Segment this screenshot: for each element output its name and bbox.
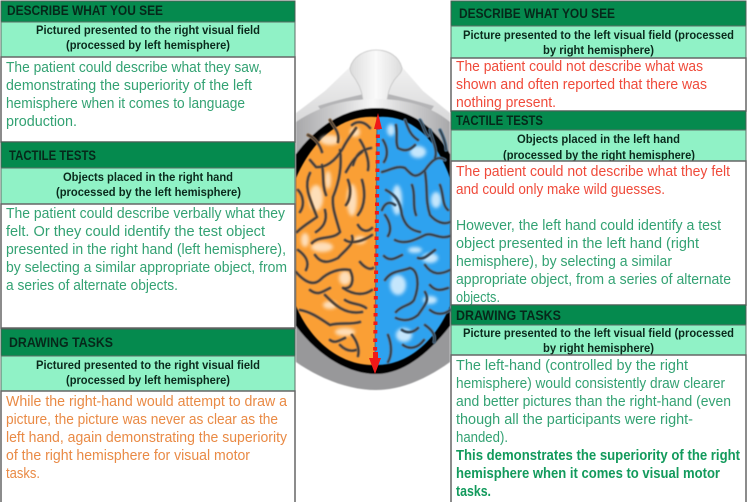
result text: objects.: [456, 290, 500, 306]
head outline: grey skull and nose: [296, 50, 450, 390]
right panel: describe what you see: [451, 1, 746, 111]
result text: hemisphere when it comes to language: [6, 96, 245, 112]
condition: [1, 356, 295, 391]
heading: DRAWING TASKS: [456, 307, 561, 323]
heading: [451, 111, 746, 130]
result text: by selecting a similar appropriate object, from: [6, 260, 287, 276]
result text: While the right-hand would attempt to draw a: [6, 394, 288, 410]
condition: (processed by left hemisphere): [66, 373, 230, 387]
heading: [1, 329, 295, 356]
right hemisphere: blue: [375, 117, 450, 365]
result text: [451, 161, 746, 306]
heading: DESCRIBE WHAT YOU SEE: [459, 5, 615, 21]
condition: (processed by left hemisphere): [66, 38, 230, 52]
result text: object presented in the left hand (right: [456, 236, 699, 252]
result text: The patient could describe what they saw,: [6, 60, 262, 76]
result text: The patient could not describe what they felt: [456, 164, 730, 180]
result text: nothing present.: [456, 95, 556, 111]
condition: by right hemisphere): [543, 43, 654, 57]
condition: [1, 22, 295, 57]
result text: [1, 391, 295, 502]
result text: [451, 355, 746, 502]
right panel: tactile tests: [451, 111, 746, 306]
heading: [1, 1, 295, 22]
result text: The patient could not describe what was: [456, 59, 703, 75]
result text: [1, 57, 295, 142]
condition: (processed by the left hemisphere): [56, 185, 241, 199]
heading: DRAWING TASKS: [9, 334, 113, 350]
condition: Objects placed in the left hand: [517, 132, 680, 146]
heading: TACTILE TESTS: [9, 147, 96, 163]
result text: tasks.: [456, 484, 491, 500]
condition: [451, 325, 746, 355]
result text: [1, 204, 295, 328]
condition: (processed by the right hemisphere): [503, 148, 695, 162]
result text: hemisphere when it comes to visual motor: [456, 466, 720, 482]
result text: left hand, again demonstrating the superiority: [6, 430, 288, 446]
result text: [451, 58, 746, 111]
heading: [1, 142, 295, 168]
dotted red midline arrow: [369, 113, 382, 374]
heading: TACTILE TESTS: [456, 112, 543, 128]
result text: a series of alternate objects.: [6, 278, 178, 294]
result text: However, the left hand could identify a test: [456, 218, 721, 234]
heading: [451, 305, 746, 325]
condition: [451, 26, 746, 58]
left hemisphere: orange: [296, 117, 377, 365]
condition: [1, 168, 295, 204]
condition: Pictured presented to the right visual field: [36, 23, 260, 37]
result text: The left-hand (controlled by the right: [456, 358, 688, 374]
condition: by right hemisphere): [543, 341, 654, 355]
condition: Picture presented to the left visual field (processed: [463, 326, 734, 340]
condition: [451, 130, 746, 162]
condition: Pictured presented to the right visual field: [36, 358, 260, 372]
result text: presented in the right hand (left hemisphere),: [6, 242, 286, 258]
condition: Objects placed in the right hand: [63, 170, 233, 184]
result text: picture, the picture was never as clear as the: [6, 412, 278, 428]
result text: of the right hemisphere for visual motor: [6, 448, 250, 464]
result text: demonstrating the superiority of the left: [6, 78, 252, 94]
result text: production.: [6, 114, 77, 130]
result text: hemisphere), by selecting a similar: [456, 254, 672, 270]
result text: The patient could describe verbally what they: [6, 206, 286, 222]
result text: and could only make wild guesses.: [456, 182, 665, 198]
result text: handed).: [456, 430, 508, 446]
result text: and better pictures than the right-hand (even: [456, 394, 731, 410]
result text: appropriate object, from a series of alternate: [456, 272, 731, 288]
result text: tasks.: [6, 466, 40, 482]
result text: felt. Or they could identify the test object: [6, 224, 265, 240]
left panel: drawing tasks: [1, 329, 295, 502]
heading: DESCRIBE WHAT YOU SEE: [7, 2, 163, 18]
illustration: brain viewed from above: [296, 50, 450, 390]
condition: Picture presented to the left visual field (processed: [463, 28, 734, 42]
left panel: tactile tests: [1, 142, 295, 328]
left panel: describe what you see: [1, 1, 295, 142]
right panel: drawing tasks: [451, 305, 746, 502]
result text: though all the participants were right-: [456, 412, 693, 428]
result text: hemisphere) would consistently draw clearer: [456, 376, 725, 392]
heading: [451, 1, 746, 26]
result text: shown and often reported that there was: [456, 77, 707, 93]
